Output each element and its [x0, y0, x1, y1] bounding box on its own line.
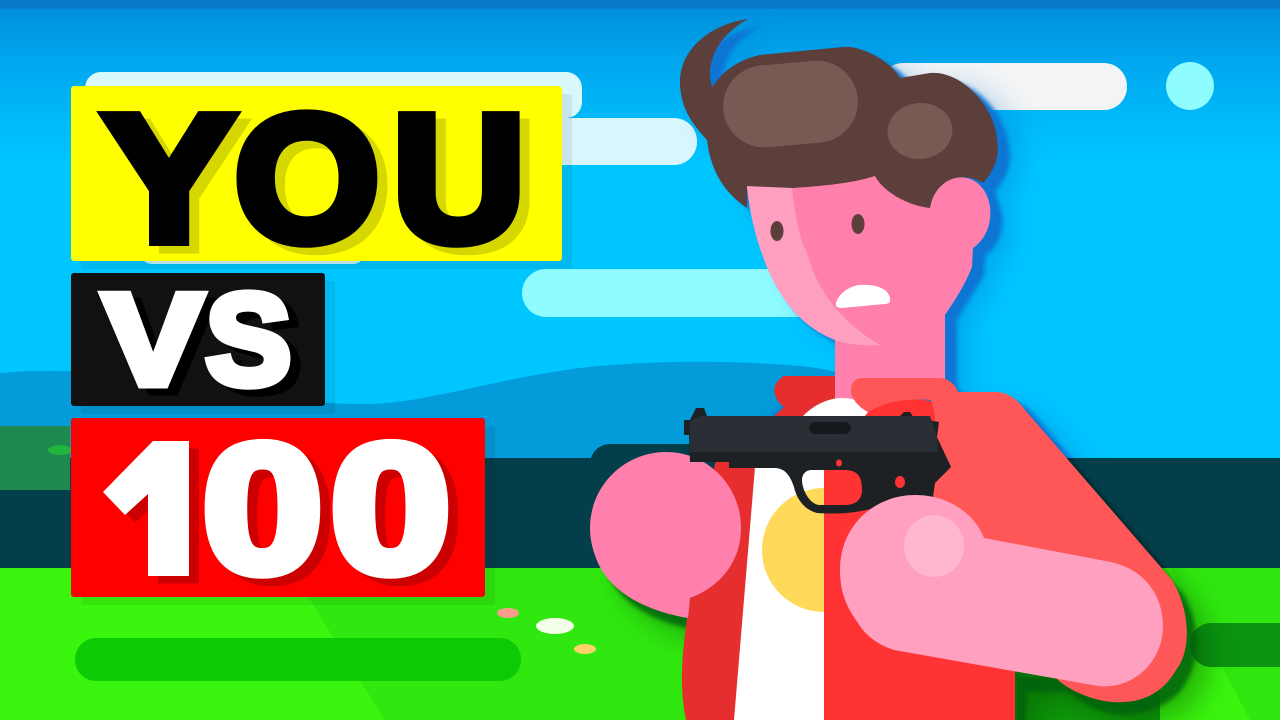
- clouds: [85, 62, 1214, 317]
- label: YOU: O: [244, 86, 390, 287]
- character shadow: [603, 27, 1211, 720]
- gun: [684, 408, 951, 514]
- label: YOU: U: [393, 78, 525, 280]
- head: [747, 176, 990, 345]
- label: 100: 1: [98, 406, 232, 612]
- label: YOU: O: [234, 78, 380, 280]
- grass: [0, 568, 1280, 720]
- jacket: right side: [824, 378, 1187, 720]
- label: VS: S: [216, 275, 301, 419]
- label: YOU: [71, 78, 572, 287]
- shirt: [734, 398, 872, 720]
- hair: [680, 19, 998, 208]
- distant hills: [0, 362, 1000, 458]
- label: 100: 0: [213, 414, 333, 618]
- character: [590, 19, 1211, 720]
- label: YOU: Y: [114, 86, 244, 287]
- jacket: left side: [682, 376, 835, 720]
- neck: [835, 305, 945, 402]
- dark horizon band: [0, 426, 1280, 570]
- label: 100: 0: [341, 414, 461, 618]
- label: VS: V: [104, 268, 202, 412]
- label: VS: S: [206, 268, 291, 412]
- label: 100: [71, 418, 495, 605]
- label: 100: 0: [331, 406, 451, 610]
- left arm: [590, 452, 741, 618]
- label: 100: 0: [203, 406, 323, 610]
- right arm: [840, 495, 1163, 686]
- label: YOU: U: [403, 86, 535, 287]
- sky background: [0, 0, 1280, 460]
- label: VS: V: [114, 275, 212, 419]
- label: YOU: Y: [104, 78, 234, 280]
- label: VS: [71, 268, 335, 419]
- label: 100: 1: [108, 413, 242, 620]
